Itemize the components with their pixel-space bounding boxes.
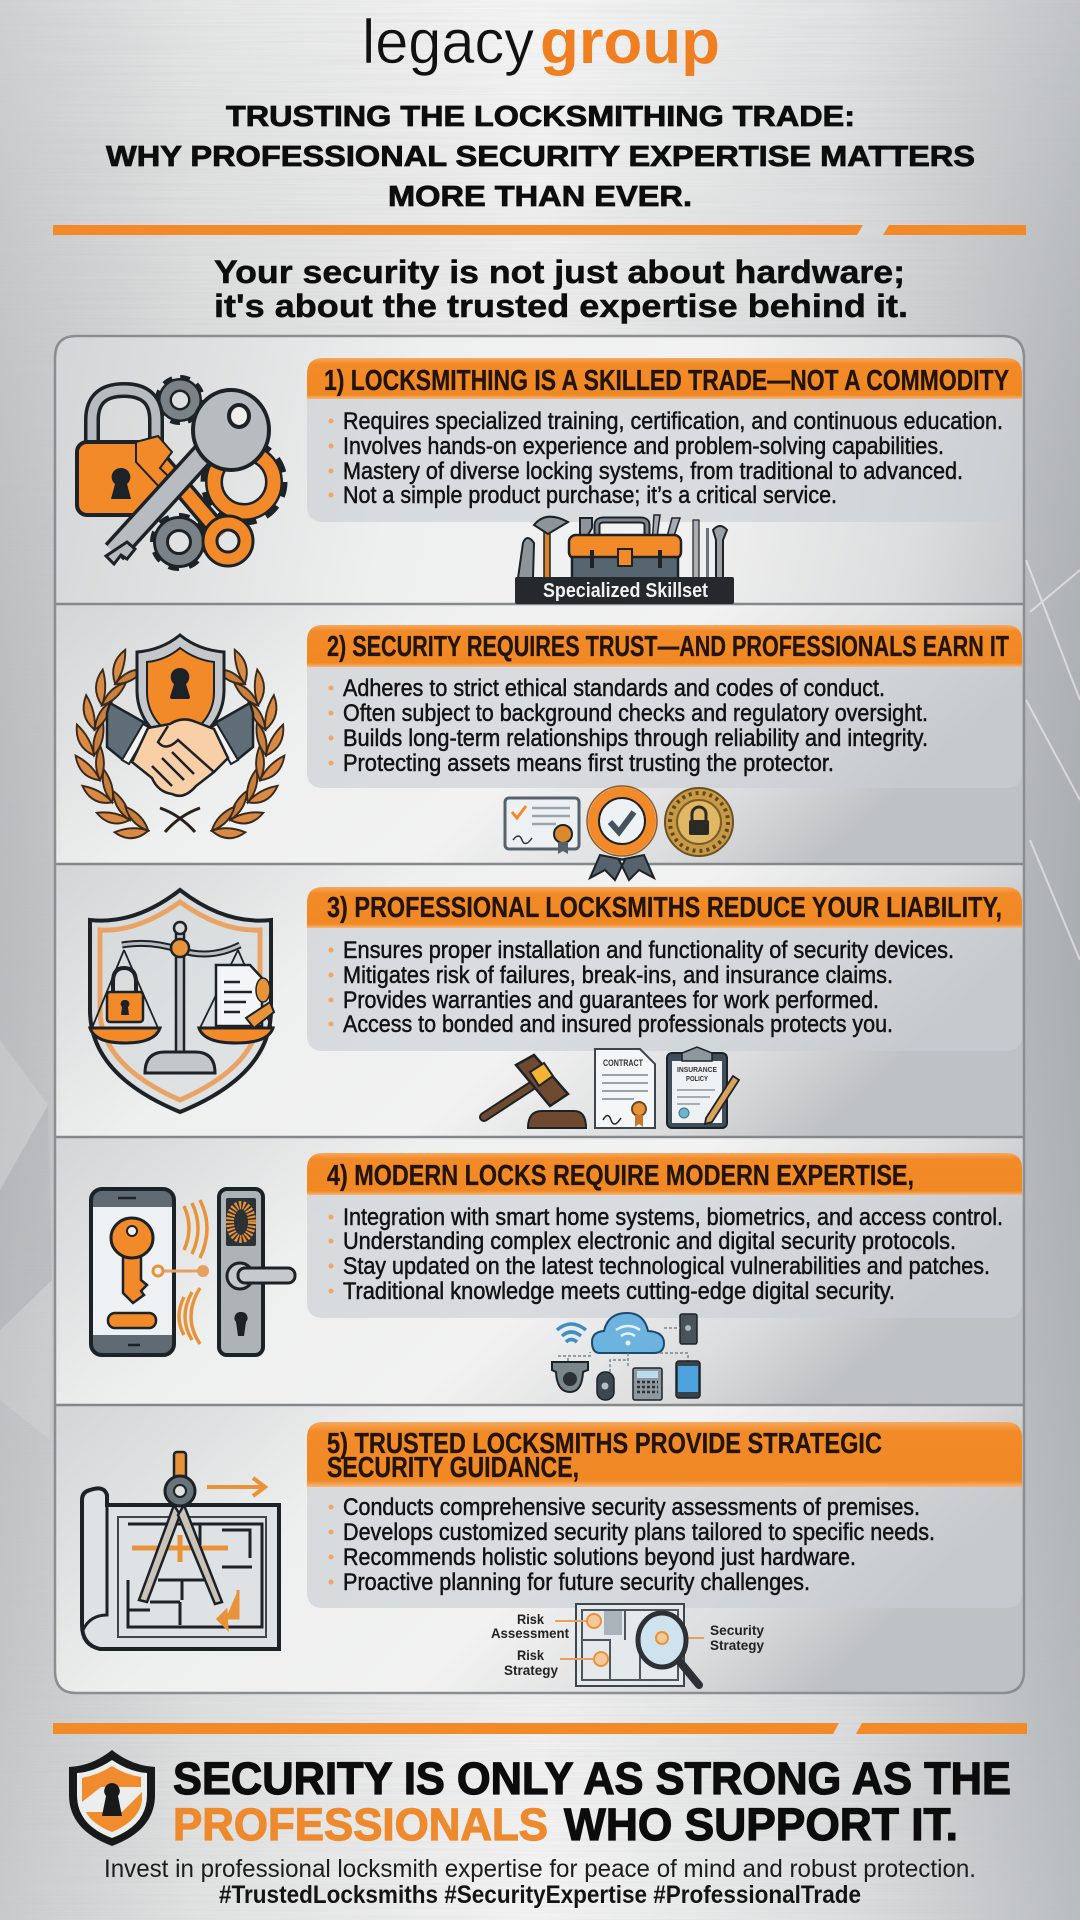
icon: padlock, key, wrench and gears	[77, 379, 282, 567]
bullet list	[307, 1195, 1022, 1318]
bullet list: Often subject to background checks and regulatory oversight.	[343, 700, 928, 727]
hashtags: #TrustedLocksmiths #SecurityExpertise #ProfessionalTrade	[219, 1881, 861, 1909]
bullet list	[307, 928, 1022, 1051]
bullet list: Ensures proper installation and functionality of security devices.	[343, 937, 954, 964]
diagram: floor plan risk map with labels: Assessment	[491, 1625, 569, 1641]
icon: scales inside shield	[90, 890, 274, 1112]
closing statement	[173, 1753, 1011, 1850]
bullet list: Conducts comprehensive security assessments of premises.	[343, 1494, 920, 1521]
icon: certificate	[505, 798, 579, 854]
bullet list	[307, 1487, 1022, 1608]
icon: contract document	[595, 1049, 655, 1128]
icon: connected smart devices and cloud	[552, 1313, 700, 1400]
heading: SECURITY GUIDANCE,	[327, 1452, 579, 1484]
bullet list: Integration with smart home systems, biometrics, and access control.	[343, 1204, 1003, 1231]
panel 4: modern expertise	[91, 1153, 1022, 1400]
closing statement: SECURITY IS ONLY AS STRONG AS THE	[173, 1753, 1011, 1804]
bullet list: Mastery of diverse locking systems, from traditional to advanced.	[343, 458, 963, 485]
bullet list	[307, 399, 1022, 522]
bullet list: Recommends holistic solutions beyond just hardware.	[343, 1544, 856, 1571]
bullet list	[307, 667, 1022, 788]
title: MORE THAN EVER.	[388, 181, 692, 213]
top orange divider bar	[53, 225, 1026, 235]
panel 5: strategic guidance	[82, 1422, 1022, 1686]
bullet list: Access to bonded and insured professionals protects you.	[343, 1011, 893, 1038]
heading: 4) MODERN LOCKS REQUIRE MODERN EXPERTISE,	[327, 1160, 914, 1192]
diagram: floor plan risk map with labels: Strategy	[710, 1637, 764, 1653]
subtitle: Your security is not just about hardware;	[214, 254, 905, 290]
icon: shield, handshake and laurel wreath	[75, 635, 285, 846]
heading	[307, 1422, 1022, 1487]
bullet list: Mitigates risk of failures, break-ins, and insurance claims.	[343, 962, 893, 989]
panel 3: liability	[90, 887, 1022, 1128]
panel 2: trust	[75, 625, 1022, 880]
logo: group	[540, 8, 720, 77]
icon: toolbox with specialized skillset label	[515, 515, 734, 604]
bullet list: Not a simple product purchase; it’s a critical service.	[343, 482, 837, 509]
bullet list: Traditional knowledge meets cutting-edge digital security.	[343, 1278, 895, 1305]
logo	[362, 8, 720, 77]
icon: contract document: CONTRACT	[603, 1058, 643, 1068]
diagram: floor plan risk map with labels: Risk	[517, 1647, 544, 1663]
subtitle: it's about the trusted expertise behind it.	[214, 288, 908, 324]
bullet list: Provides warranties and guarantees for work performed.	[343, 987, 879, 1014]
icon: footer shield logo	[69, 1750, 155, 1846]
icon: insurance policy clipboard	[667, 1047, 739, 1128]
diagram: floor plan risk map with labels: Security	[710, 1622, 764, 1638]
bullet list: Understanding complex electronic and digital security protocols.	[343, 1228, 956, 1255]
heading	[307, 625, 1022, 667]
closing statement: WHO SUPPORT IT.	[564, 1799, 958, 1850]
diagram: floor plan risk map with labels: Risk	[517, 1611, 544, 1627]
panel frame	[55, 336, 1024, 1693]
icon: gavel	[484, 1055, 586, 1128]
title: WHY PROFESSIONAL SECURITY EXPERTISE MATTERS	[106, 141, 975, 173]
diagram: floor plan risk map with labels	[491, 1604, 764, 1686]
bullet list: Involves hands-on experience and problem-solving capabilities.	[343, 433, 944, 460]
icon: toolbox with specialized skillset label: Specialized Skillset	[543, 580, 708, 602]
icon: rosette badge with check	[587, 786, 657, 880]
icon: insurance policy clipboard: POLICY	[686, 1076, 708, 1083]
bullet list: Develops customized security plans tailored to specific needs.	[343, 1519, 935, 1546]
closing statement: PROFESSIONALS	[173, 1799, 548, 1850]
bullet list: Proactive planning for future security challenges.	[343, 1569, 810, 1596]
icon: compass on blueprint	[82, 1452, 279, 1649]
bullet list: Protecting assets means first trusting the protector.	[343, 750, 834, 777]
bullet list: Adheres to strict ethical standards and codes of conduct.	[343, 675, 885, 702]
subtitle	[214, 254, 908, 324]
title	[106, 101, 975, 213]
heading: 5) TRUSTED LOCKSMITHS PROVIDE STRATEGIC	[327, 1428, 882, 1460]
panel 1: skilled trade	[77, 358, 1022, 604]
icon: smartphone key and smart door lock	[91, 1189, 295, 1355]
bullet list: Stay updated on the latest technological vulnerabilities and patches.	[343, 1253, 990, 1280]
title: TRUSTING THE LOCKSMITHING TRADE:	[226, 101, 855, 133]
call to action: Invest in professional locksmith expertise for peace of mind and robust protection.	[104, 1855, 976, 1883]
bottom orange divider bar	[53, 1723, 1027, 1734]
bullet list: Builds long-term relationships through reliability and integrity.	[343, 725, 928, 752]
diagram: floor plan risk map with labels: Strategy	[504, 1662, 558, 1678]
icon: insurance policy clipboard: INSURANCE	[677, 1067, 717, 1074]
icon: gold seal with padlock	[665, 788, 733, 856]
logo: legacy	[362, 8, 534, 77]
bullet list: Requires specialized training, certification, and continuous education.	[343, 408, 1003, 435]
